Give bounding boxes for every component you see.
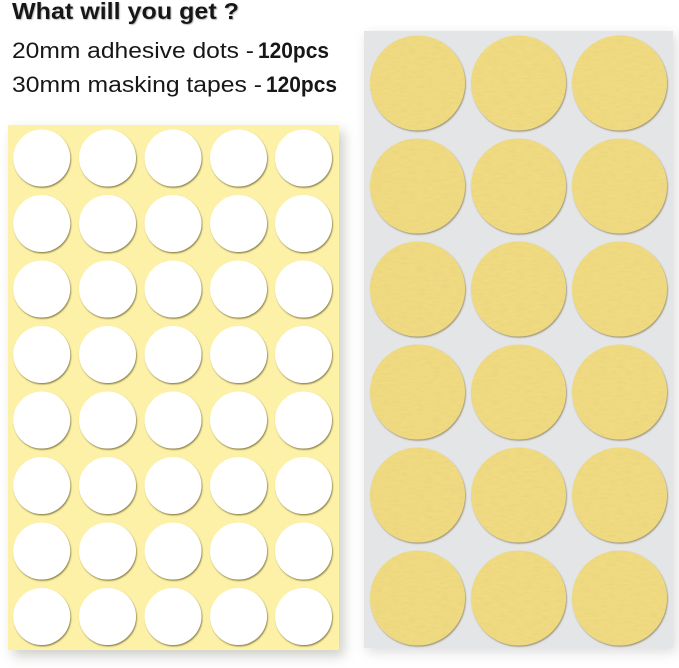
line: masking tapes quantity: 120pcs: [266, 72, 337, 97]
text block: contents list: [12, 38, 337, 97]
line: adhesive dots quantity: 20mm adhesive dots -: [12, 38, 254, 63]
line: adhesive dots quantity: 120pcs: [258, 38, 329, 63]
panel: grey sheet of yellow masking tape dots: [364, 31, 676, 652]
line: masking tapes quantity: 30mm masking tapes -: [12, 72, 262, 97]
masking tape dots grid: 3 columns by 6 rows: [370, 36, 667, 646]
white dots grid: 5 columns by 8 rows: [13, 130, 332, 645]
panel: yellow sheet of white adhesive dots: [8, 125, 344, 656]
